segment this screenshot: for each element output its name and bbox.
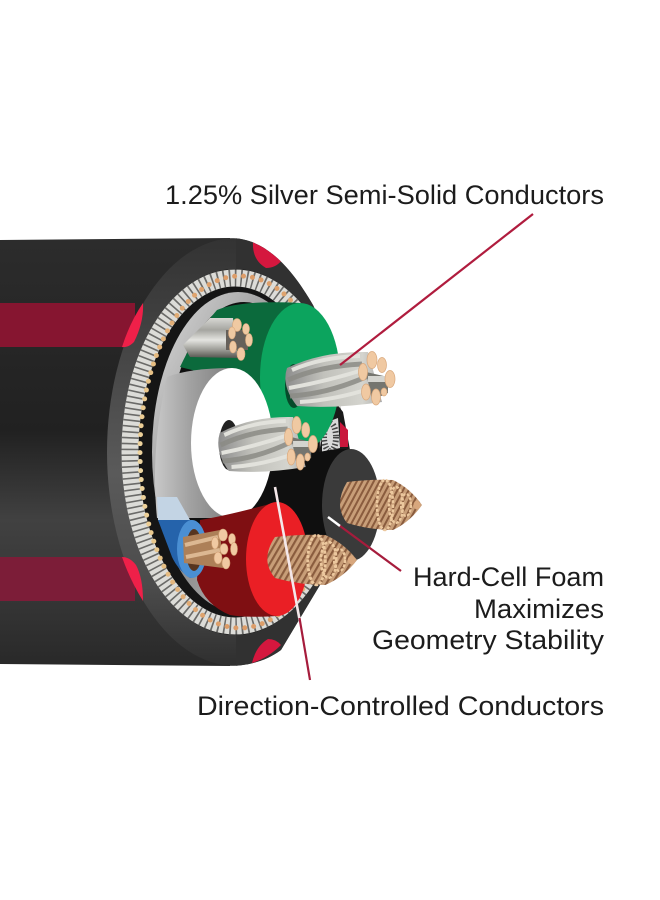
- silver conductor: green core: [285, 352, 395, 407]
- copper bundle: [183, 529, 238, 569]
- shield ring: [122, 269, 348, 635]
- infographic: cable cutaway diagram: [0, 184, 604, 716]
- red insulated core: [197, 502, 357, 617]
- red stripe: upper: [0, 303, 135, 347]
- inner silver band: [152, 292, 324, 612]
- copper conductor: red core: [267, 535, 357, 585]
- label: hard-cell foam: Geometry Stability: [372, 625, 605, 655]
- green insulated core: [180, 302, 395, 451]
- rear detail beside green core: [318, 395, 350, 458]
- leader line: foam: [328, 517, 401, 571]
- label: hard-cell foam: [372, 562, 605, 655]
- silver conductor: white core: [218, 416, 317, 472]
- small silver bundle: [183, 318, 252, 360]
- copper conductor: black core: [340, 480, 422, 530]
- label: direction-controlled conductors: Direction-Controlled Conductors: [197, 691, 604, 721]
- rim marker: bottom: [252, 639, 281, 663]
- cable jacket: [0, 238, 230, 666]
- label: hard-cell foam: Maximizes: [474, 594, 604, 624]
- black insulated core: [262, 449, 422, 575]
- rim marker: top: [253, 242, 282, 268]
- blue insulated core: [158, 520, 238, 578]
- rim marker: left upper: [122, 303, 143, 347]
- red stripe: lower: [0, 557, 135, 601]
- rim marker: left lower: [122, 557, 143, 601]
- leader line: silver conductors: [340, 214, 533, 365]
- label: silver conductors: 1.25% Silver Semi-Solid Conductors: [165, 180, 604, 210]
- end-face rim: [107, 238, 365, 666]
- white insulated core: [155, 368, 317, 520]
- label: hard-cell foam: Hard-Cell Foam: [413, 562, 604, 592]
- leader line: direction-controlled conductors: [275, 487, 310, 680]
